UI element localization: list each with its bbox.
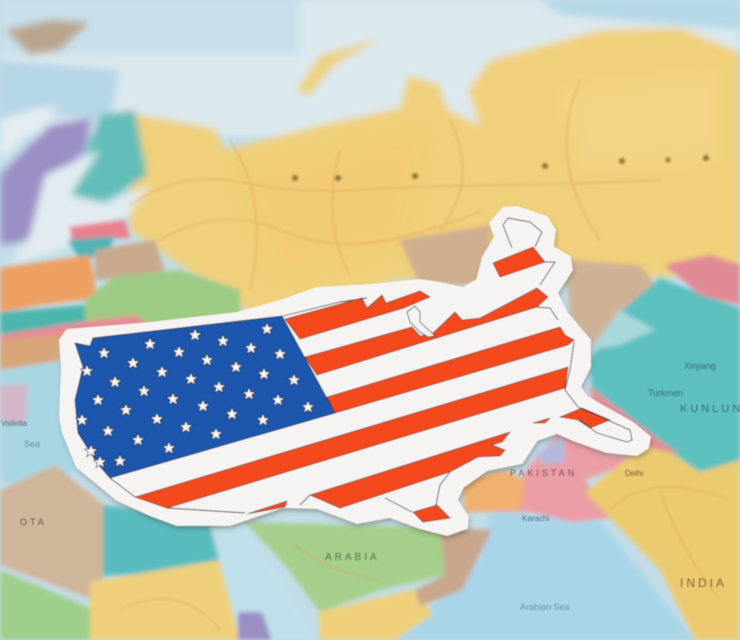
sticker shadow [61,210,651,538]
Great Lakes cut-out [407,306,435,337]
USA flag sticker [60,207,650,535]
map labels: Valletta [1,419,28,428]
Texas-side arm stripe [560,408,610,428]
stripe 1 [285,291,430,339]
canton: blue field [75,316,335,478]
map labels: Karachi [522,514,549,523]
map labels: Sea [24,439,40,449]
stars [76,322,314,468]
map labels: OTA [20,517,47,527]
soft tone variation on the yellow land [240,70,720,270]
map labels: Arabian Sea [520,602,570,612]
map labels: Xinjiang [684,361,716,371]
Florida stripe [413,505,450,522]
stripe 2 [305,288,548,375]
map roads and borders [120,80,730,630]
map labels: Turkmen [648,388,683,398]
map labels [1,361,740,612]
Maine stripe [493,247,545,277]
map labels: ARABIA [325,552,380,563]
map regions, middle and bottom [0,220,740,640]
sticker white die-cut base [60,207,650,535]
stripe 4 [135,367,568,508]
map labels: INDIA [680,576,727,590]
map labels: Delhi [625,469,643,478]
outline of the states [110,218,632,513]
small south stripe [247,501,287,514]
map city dots [292,155,709,181]
map labels: PAKISTAN [510,468,577,478]
red stripes [135,247,610,522]
map regions, top (strongly out of focus) [0,0,740,320]
stripe 3 [327,327,574,413]
stripe 5 [310,432,510,508]
